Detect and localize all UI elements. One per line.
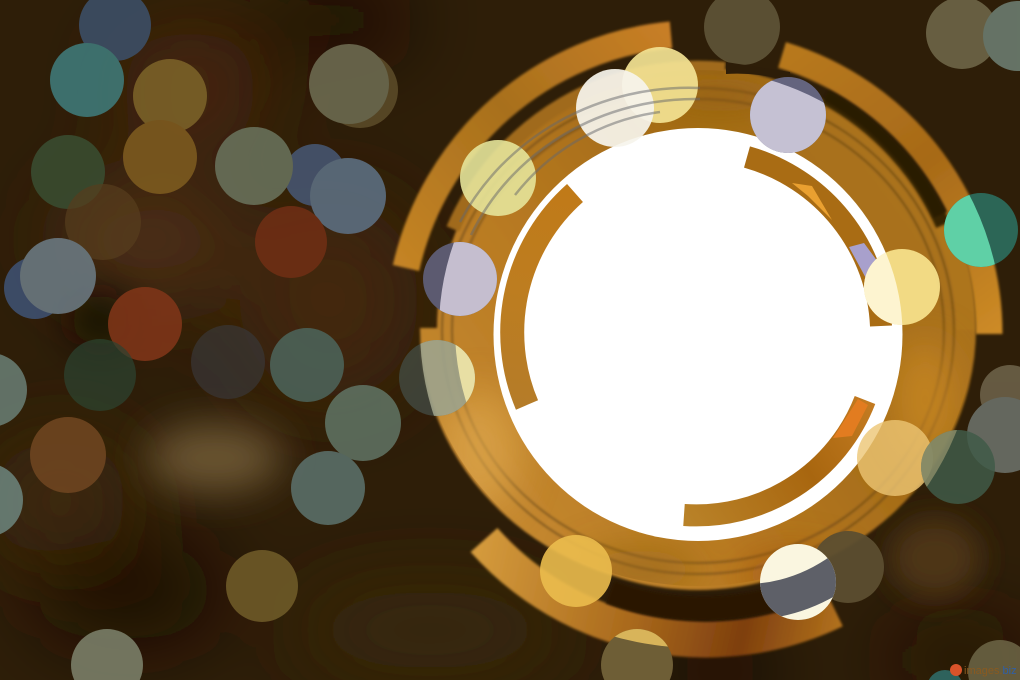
outer arc: top right [782, 55, 989, 334]
outer arc: top left [406, 35, 671, 268]
bokeh: white and grey bottom [760, 544, 836, 620]
bokeh lights: top and right background [704, 0, 1020, 680]
ring top left band [453, 68, 725, 229]
bokeh: yellow top [622, 47, 698, 123]
white centre circle [494, 128, 902, 541]
orange glint: bottom right arc [833, 399, 868, 438]
inner arc: top right [747, 157, 881, 326]
watermark icon [950, 664, 962, 676]
shadow band under the ring: bottom [610, 592, 790, 608]
ring lines over bokeh [460, 88, 700, 235]
bokeh: gold lower right [857, 420, 933, 496]
bokeh: lavender top right [750, 77, 826, 153]
bokeh: yellow right [864, 249, 940, 325]
bokeh: brown bottom right [812, 531, 884, 603]
ring groove lines [442, 88, 954, 574]
ring highlights [440, 77, 955, 595]
ring body [470, 101, 926, 557]
orange glint: top right arc [792, 183, 832, 220]
bokeh: pale yellow top left [460, 140, 536, 216]
ring notch: top [726, 62, 790, 82]
bokeh: teal right [944, 193, 1018, 267]
watermark text: images.biz [964, 665, 1017, 677]
bokeh: lavender left [423, 242, 497, 316]
inner arc: bottom right [684, 400, 865, 515]
inner arc: left [512, 193, 575, 405]
ring shadow: top right [825, 97, 943, 225]
bokeh: tan bottom [601, 629, 673, 680]
bokeh: cream left [399, 340, 475, 416]
bokeh lights: over ring [399, 47, 1018, 680]
bokeh: grey green lower right [921, 430, 995, 504]
golden ring [430, 68, 966, 578]
ring lower band [430, 328, 966, 578]
bokeh: yellow bottom [540, 535, 612, 607]
lavender glint: right [849, 243, 878, 282]
bokeh: white top [576, 69, 654, 147]
watermark [950, 664, 1017, 677]
ring right band [940, 215, 966, 330]
outer arc: bottom [484, 540, 835, 640]
bokeh lights: left field [0, 0, 401, 680]
